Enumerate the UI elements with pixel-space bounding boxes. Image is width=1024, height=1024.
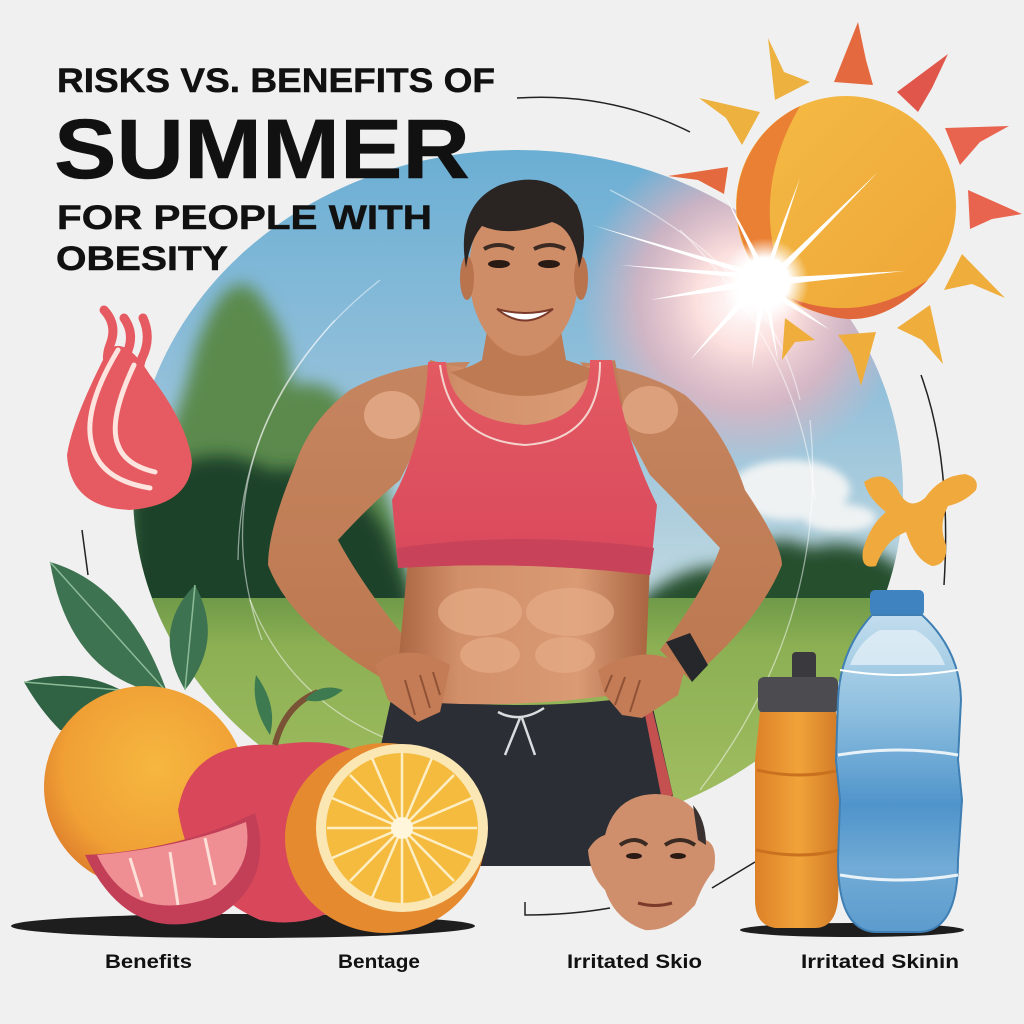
neck xyxy=(450,325,600,396)
eyes xyxy=(488,260,560,268)
head xyxy=(469,188,579,356)
thin connector lines xyxy=(82,97,946,915)
sun disc xyxy=(736,96,956,316)
sun xyxy=(592,22,1022,386)
shorts xyxy=(381,695,673,866)
label: Bentage: Bentage xyxy=(338,952,420,973)
label: Benefits: Benefits xyxy=(105,952,192,973)
title: RISKS VS. BENEFITS OF xyxy=(57,62,495,100)
right arm xyxy=(580,362,782,680)
orange half xyxy=(285,743,488,933)
watch xyxy=(666,633,708,682)
left arm xyxy=(268,362,470,680)
shorts drawstring xyxy=(498,708,544,755)
ground shadow right xyxy=(740,923,964,937)
label: Irritated Skinin: Irritated Skinin xyxy=(801,952,959,973)
whole orange xyxy=(44,686,246,888)
grapefruit slice xyxy=(85,813,260,924)
leaves xyxy=(24,562,208,731)
icon: heat drop xyxy=(67,310,192,510)
sun starburst xyxy=(592,172,905,368)
right hand xyxy=(598,654,685,718)
title: FOR PEOPLE WITH xyxy=(57,199,432,237)
torso xyxy=(395,360,650,704)
left hand xyxy=(375,652,450,722)
muscle highlights xyxy=(364,386,678,673)
water bottle xyxy=(836,590,962,932)
icon: orange splat xyxy=(863,474,977,567)
title: OBESITY xyxy=(56,240,228,278)
title xyxy=(54,62,495,278)
hair xyxy=(464,180,584,268)
apple xyxy=(178,675,370,922)
ground shadow left xyxy=(11,914,475,938)
man xyxy=(268,180,782,866)
sun rays xyxy=(668,22,1022,386)
label: Irritated Skio: Irritated Skio xyxy=(567,952,702,973)
smile xyxy=(497,309,553,320)
title: SUMMER xyxy=(54,102,470,196)
face icon xyxy=(588,794,715,930)
crop top xyxy=(392,360,657,575)
orange sports bottle xyxy=(755,652,842,928)
park scene circle xyxy=(130,135,910,848)
